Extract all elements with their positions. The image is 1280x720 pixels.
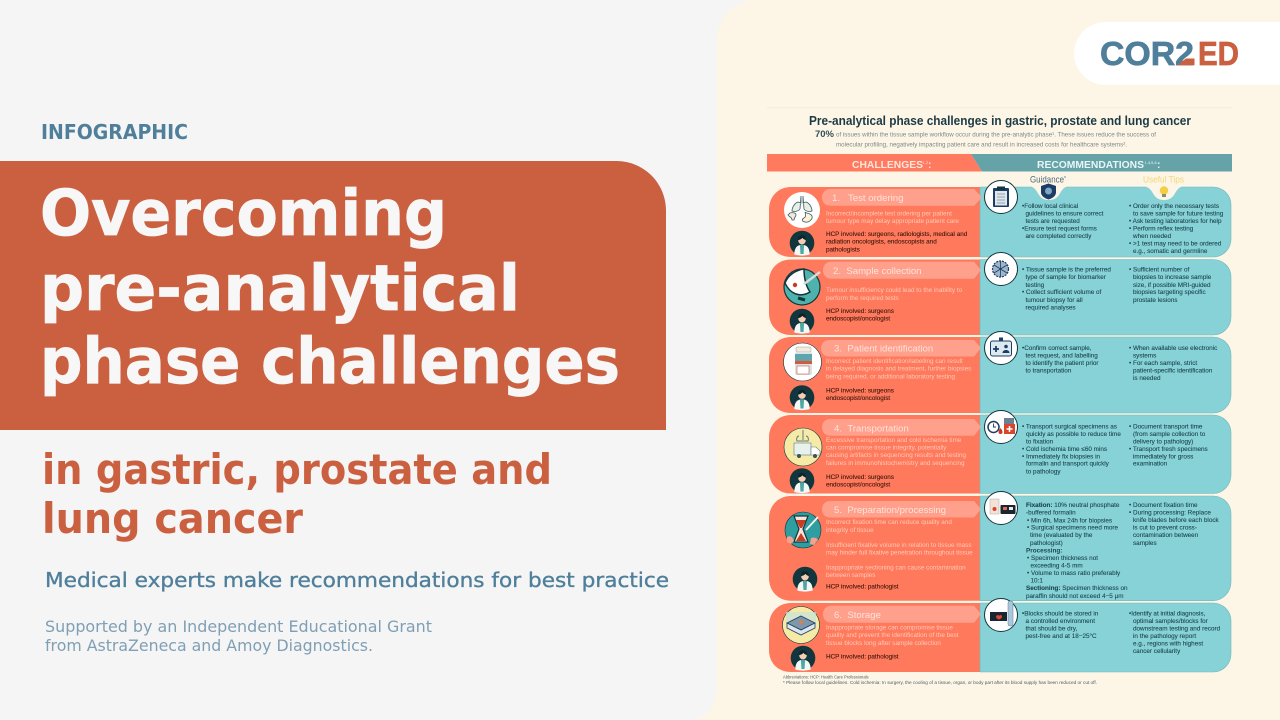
useful tips text: patient-specific identification	[1133, 368, 1213, 375]
step title: 6. Storage	[834, 610, 881, 621]
useful tips text: is needed	[1133, 375, 1161, 382]
panel: row 3 patient identification	[769, 332, 1231, 413]
useful tips text: • Ask testing laboratories for help	[1129, 218, 1222, 225]
column headers: :	[1157, 160, 1160, 171]
guidance text: tumour biopsy for all	[1026, 297, 1083, 304]
guidance text: pest-free and at 18−25°C	[1026, 632, 1097, 640]
icon: lungs and stomach	[784, 192, 820, 228]
icon: doctor	[790, 231, 814, 256]
HCP text: radiation oncologists, endoscopists and	[826, 239, 937, 246]
tagline: Medical experts make recommendations for best practice	[45, 568, 669, 592]
useful tips text: e.g., somatic and germline	[1133, 248, 1208, 255]
useful tips text: • Sufficient number of	[1129, 266, 1190, 274]
useful tips text: samples	[1133, 540, 1157, 547]
useful tips text: when needed	[1132, 233, 1172, 240]
useful tips text: immediately for gross	[1133, 453, 1193, 460]
icon: tissue cell	[984, 252, 1018, 286]
guidance text: quickly as possible to reduce time	[1026, 431, 1121, 438]
guidance heading and shield: Guidance	[1030, 174, 1064, 186]
useful tips text	[1129, 345, 1217, 382]
footnotes	[783, 674, 1097, 685]
useful tips text: • Document fixation time	[1129, 502, 1198, 509]
HCP text: HCP involved: surgeons	[826, 387, 894, 394]
useful tips text: • Perform reflex testing	[1129, 226, 1194, 233]
guidance text: • Collect sufficient volume of	[1022, 289, 1102, 296]
grant statement	[45, 617, 432, 655]
guidance text	[1022, 266, 1111, 312]
icon: transport truck	[784, 428, 822, 466]
guidance text: •Blocks should be stored in	[1022, 610, 1099, 617]
useful tips heading and bulb: Useful Tips	[1143, 174, 1184, 186]
useful tips text	[1129, 610, 1221, 655]
column headers	[767, 154, 1232, 172]
useful tips text: e.g., regions with highest	[1133, 641, 1203, 648]
challenge text: perform the required tests	[826, 295, 899, 302]
challenge text	[826, 210, 959, 225]
guidance text: test request, and labelling	[1026, 352, 1098, 360]
column headers: RECOMMENDATIONS	[1037, 160, 1144, 171]
guidance text: •Confirm correct sample,	[1022, 345, 1092, 352]
infographic heading: Pre-analytical phase challenges in gastric, prostate and lung cancer	[809, 113, 1191, 128]
icon: tissue cassette	[984, 492, 1018, 524]
useful tips text: is cut to prevent cross-	[1133, 525, 1197, 532]
guidance text	[1022, 345, 1098, 375]
useful tips heading and bulb	[1143, 174, 1184, 200]
challenge text: may hinder full fixative penetration throughout tissue	[826, 550, 973, 557]
challenge text: causing artifacts in sequencing results and testing	[826, 452, 966, 459]
useful tips text: knife blades before each block	[1133, 517, 1220, 524]
logo: COR2ED: COR2	[1100, 35, 1194, 72]
useful tips text: size, if possible MRI-guided	[1133, 282, 1211, 289]
guidance text	[1022, 610, 1099, 640]
useful tips text: (from sample collection to	[1133, 431, 1206, 438]
guidance text: pathologist)	[1030, 540, 1063, 547]
useful tips text: to save sample for future testing	[1133, 210, 1224, 218]
useful tips text	[1129, 502, 1220, 547]
grant statement: Supported by an Independent Educational Grant	[45, 617, 432, 636]
useful tips text: biopsies targeting specific	[1133, 289, 1206, 296]
guidance text: Fixation: 10% neutral phosphate	[1026, 502, 1120, 509]
challenge text: Excessive transportation and cold ischemia time	[826, 437, 962, 444]
icon: tissue blocks	[782, 606, 820, 644]
HCP text: pathologists	[826, 246, 860, 254]
guidance text: time (evaluated by the	[1030, 532, 1093, 539]
infographic heading: 70%	[815, 129, 835, 140]
guidance text: 10:1	[1030, 578, 1043, 585]
step pill	[823, 262, 981, 279]
guidance text: type of sample for biomarker	[1026, 274, 1106, 281]
icon: sample jar	[784, 343, 822, 381]
icon: clipboard	[984, 180, 1018, 214]
HCP text: endoscopist/oncologist	[826, 316, 890, 323]
guidance text: Sectioning: Specimen thickness on	[1026, 585, 1128, 592]
subtitle	[42, 445, 552, 543]
step pill	[822, 189, 982, 206]
useful tips text: examination	[1133, 461, 1168, 468]
guidance text: required analyses	[1026, 305, 1076, 312]
challenge text	[826, 287, 963, 302]
guidance text: • Surgical specimens need more	[1027, 525, 1119, 532]
cream panel	[692, 0, 1280, 720]
guidance text: that should be dry,	[1026, 626, 1077, 633]
guidance text: to identify the patient prior	[1026, 360, 1098, 367]
useful tips text: • Document transport time	[1129, 423, 1203, 430]
step title: 4. Transportation	[834, 424, 909, 434]
guidance text: tests are requested	[1026, 218, 1080, 225]
title banner	[0, 161, 666, 430]
useful tips text: •Identify at initial diagnosis,	[1129, 610, 1206, 617]
useful tips text: • Order only the necessary tests	[1129, 203, 1219, 210]
challenge text: between samples	[826, 572, 875, 579]
challenge text: failures in immunohistochemistry and sequencing	[826, 460, 965, 467]
HCP text: HCP involved: surgeons	[826, 474, 894, 481]
useful tips text: • >1 test may need to be ordered	[1129, 241, 1222, 248]
guidance text: • Min 6h, Max 24h for biopsies	[1027, 517, 1112, 524]
useful tips text	[1129, 266, 1212, 304]
icon: clock and cool box	[984, 410, 1018, 444]
title banner: phase challenges	[40, 325, 620, 398]
step pill	[821, 340, 981, 356]
HCP text: endoscopist/oncologist	[826, 395, 890, 402]
guidance text: testing	[1026, 282, 1045, 289]
challenge text: tumour type may delay appropriate patient care	[826, 218, 959, 225]
title banner: pre-analytical	[40, 252, 520, 325]
column headers: :	[928, 160, 931, 171]
guidance text	[1022, 203, 1104, 240]
useful tips text: prostate lesions	[1133, 297, 1177, 304]
panel: row 4 transportation	[769, 410, 1231, 494]
challenge text: Tumour insufficiency could lead to the inability to	[826, 287, 963, 294]
HCP text	[826, 308, 894, 323]
challenge text	[826, 624, 959, 647]
logo: COR2ED	[1074, 22, 1280, 85]
guidance text: •Ensure test request forms	[1022, 226, 1097, 233]
useful tips text: • Transport fresh specimens	[1129, 446, 1208, 453]
challenge text	[826, 519, 973, 579]
challenge text: in delayed diagnosis and treatment, further biopsies	[826, 366, 971, 373]
challenge text: Incorrect fixation time can reduce quality and	[826, 519, 952, 526]
HCP text: endoscopist/oncologist	[826, 482, 890, 489]
HCP text	[826, 231, 968, 254]
useful tips text: • For each sample, strict	[1129, 360, 1197, 367]
useful tips text	[1129, 203, 1224, 255]
panel: row 1 test ordering	[769, 180, 1231, 257]
icon: doctor	[790, 309, 814, 334]
step title: 5. Preparation/processing	[834, 505, 946, 516]
icon: ID badge	[984, 332, 1018, 364]
panel: row 2 sample collection	[769, 252, 1231, 335]
step title: 1. Test ordering	[832, 193, 903, 204]
guidance text: exceeding 4-5 mm	[1030, 563, 1083, 570]
icon: doctor	[790, 468, 814, 493]
challenge text: can compromise tissue integrity, potentially	[826, 444, 947, 452]
guidance text: guidelines to ensure correct	[1026, 210, 1104, 218]
icon: hourglass and scalpel	[785, 512, 821, 548]
useful tips text: • When available use electronic	[1129, 345, 1217, 352]
icon: doctor	[793, 567, 817, 592]
icon: doctor	[790, 385, 814, 410]
guidance text: • Transport surgical specimens as	[1022, 423, 1117, 430]
useful tips text: • During processing: Replace	[1129, 510, 1211, 517]
useful tips text: delivery to pathology)	[1133, 438, 1193, 445]
HCP text	[826, 387, 894, 402]
useful tips text: contamination between	[1133, 532, 1199, 539]
challenge text	[826, 358, 971, 380]
guidance text: paraffin should not exceed 4−5 μm	[1026, 593, 1124, 600]
HCP text	[826, 474, 894, 489]
HCP text: HCP involved: pathologist	[826, 654, 899, 660]
challenge text: Inappropriate storage can compromise tissue	[826, 624, 953, 632]
useful tips text: in the pathology report	[1133, 633, 1196, 640]
useful tips text: downstream testing and record	[1133, 626, 1221, 633]
challenge text: Incorrect/incomplete test ordering per patient	[826, 210, 952, 218]
guidance text: -buffered formalin	[1026, 510, 1076, 517]
guidance text: • Tissue sample is the preferred	[1022, 266, 1111, 274]
column headers: 1,2	[922, 160, 929, 165]
subtitle: in gastric, prostate and	[42, 445, 552, 494]
challenge text	[826, 437, 966, 467]
guidance text: to fixation	[1026, 438, 1054, 445]
guidance text: • Cold ischemia time ≤60 mins	[1022, 446, 1107, 453]
challenge text: being required, or additional laboratory testing	[826, 373, 956, 380]
grant statement: from AstraZeneca and Amoy Diagnostics.	[45, 636, 373, 655]
guidance text: to pathology	[1026, 468, 1061, 475]
icon: biopsy	[784, 269, 820, 305]
label: INFOGRAPHIC: INFOGRAPHIC	[41, 120, 188, 144]
useful tips text: optimal samples/blocks for	[1133, 618, 1208, 625]
subtitle: lung cancer	[42, 494, 303, 543]
column headers: CHALLENGES	[852, 160, 923, 171]
guidance heading and shield	[1030, 174, 1067, 200]
title banner: Overcoming	[40, 177, 447, 250]
step title: 3. Patient identification	[834, 344, 933, 354]
useful tips text: systems	[1133, 352, 1156, 360]
challenge text: quality and prevent the identification of the best	[826, 632, 959, 639]
step pill	[822, 501, 981, 518]
guidance text: •Follow local clinical	[1022, 203, 1078, 210]
useful tips text: cancer cellularity	[1133, 648, 1181, 655]
guidance text	[1022, 423, 1121, 475]
HCP text: HCP involved: surgeons	[826, 308, 894, 315]
infographic heading: of issues within the tissue sample workflow occur during the pre-analytic phase¹. These issues reduce the success of	[836, 132, 1156, 138]
logo: COR2ED: ED	[1198, 35, 1239, 72]
guidance text: Processing:	[1026, 547, 1062, 554]
useful tips text	[1129, 423, 1208, 468]
footnotes: * Please follow local guidelines. Cold ischemia: In surgery, the cooling of a tissue, organ, or body part after its blood supply has been reduced or cut off.	[783, 680, 1097, 685]
guidance text: formalin and transport quickly	[1026, 461, 1110, 468]
infographic heading	[767, 108, 1232, 148]
icon: doctor	[791, 646, 815, 671]
challenge text: tissue blocks long after sample collection	[826, 640, 941, 647]
guidance text: to transportation	[1026, 368, 1072, 375]
step title: 2. Sample collection	[833, 266, 922, 277]
challenge text: Inappropriate sectioning can cause contamination	[826, 565, 966, 572]
HCP text: HCP involved: pathologist	[826, 584, 899, 590]
challenge text: integrity of tissue	[826, 527, 874, 534]
challenge text: Insufficient fixative volume in relation to tissue mass	[826, 542, 972, 549]
panel: row 5 preparation and processing	[769, 492, 1231, 601]
step pill	[822, 419, 981, 436]
step pill	[823, 606, 981, 623]
HCP text: HCP involved: surgeons, radiologists, medical and	[826, 231, 968, 238]
guidance text: • Immediately fix biopsies in	[1022, 453, 1100, 460]
guidance heading and shield: *	[1064, 176, 1066, 182]
challenge text: Incorrect patient identification/labelling can result	[826, 358, 963, 365]
column headers: 1,4,5,6	[1144, 160, 1158, 165]
icon: storage box	[984, 598, 1018, 632]
guidance text	[1026, 502, 1128, 600]
panel: row 6 storage	[769, 598, 1231, 672]
guidance text: are completed correctly	[1026, 233, 1092, 240]
guidance text: • Volume to mass ratio preferably	[1027, 570, 1121, 577]
guidance text: a controlled environment	[1026, 618, 1095, 625]
useful tips text: biopsies to increase sample	[1133, 274, 1212, 281]
guidance text: • Specimen thickness not	[1027, 555, 1098, 562]
footnotes: Abbreviations: HCP: Health Care Professionals	[783, 674, 869, 680]
infographic heading: molecular profiling, negatively impacting patient care and result in increased costs for healthcare systems².	[836, 142, 1127, 148]
